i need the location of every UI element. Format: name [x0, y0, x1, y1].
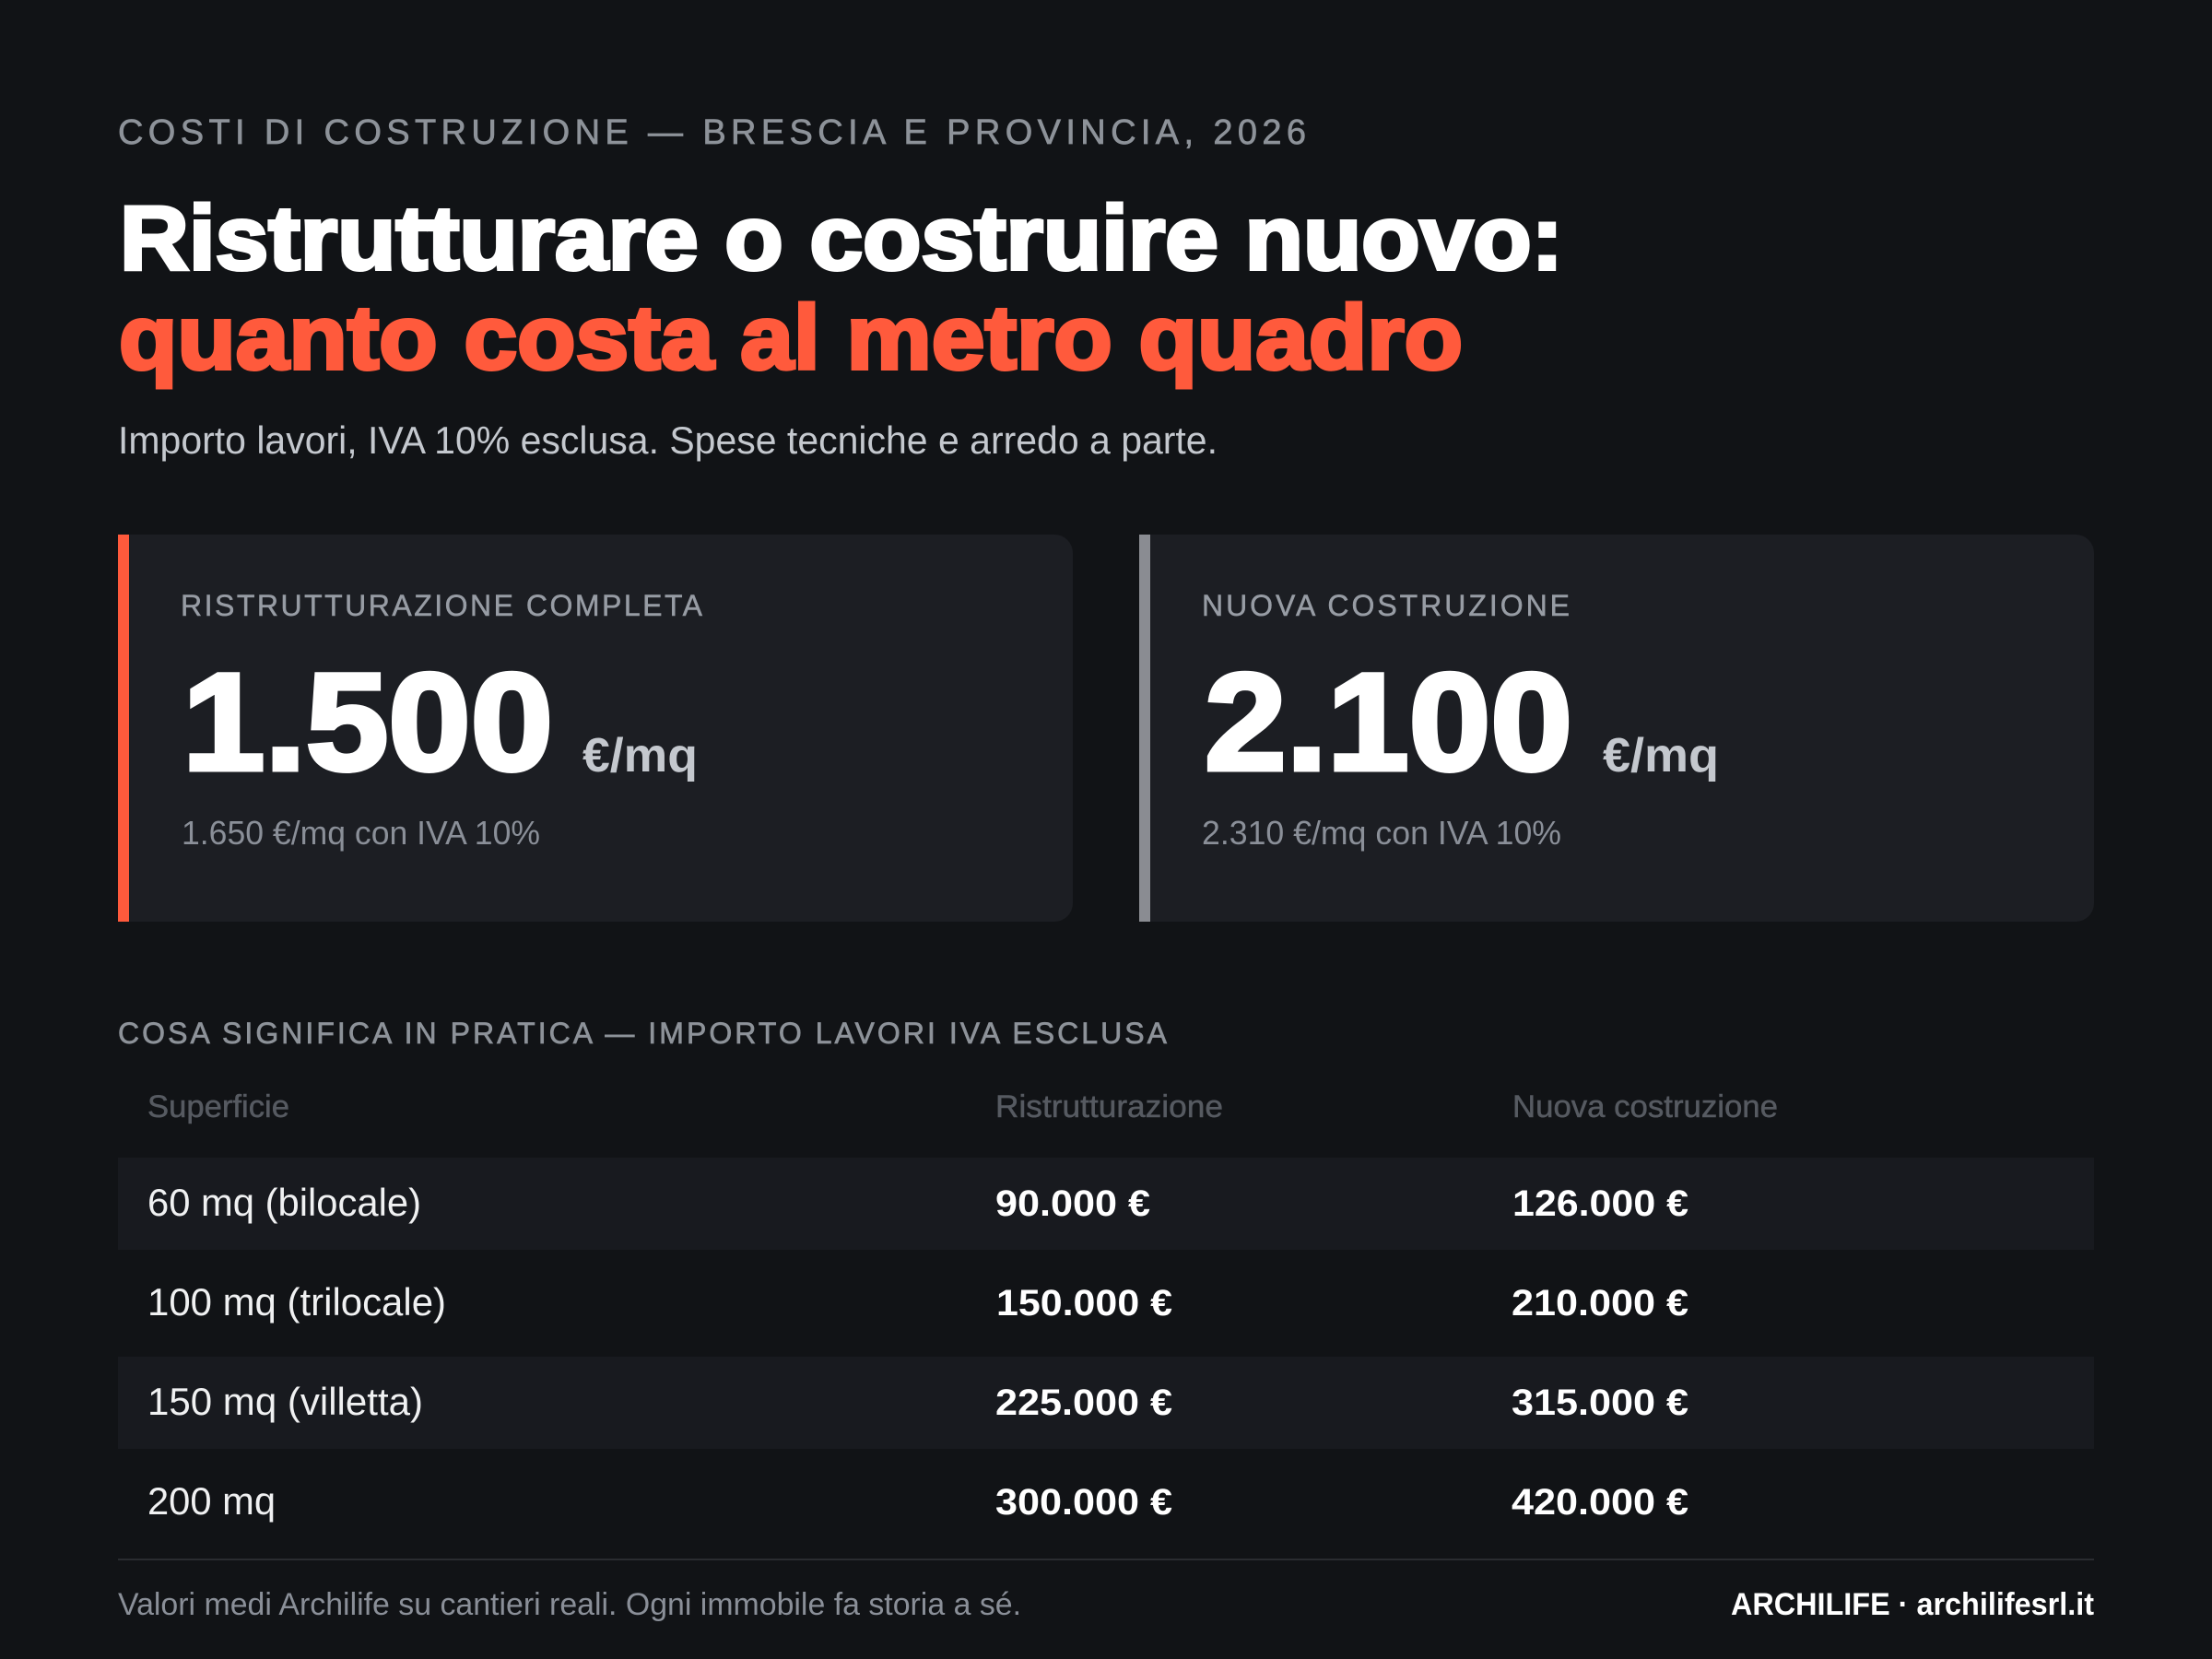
- price unit: €/mq: [1603, 729, 1719, 782]
- row: 150 mq: [118, 1357, 2094, 1449]
- panel: ristrutturazione completa: [118, 535, 1073, 922]
- card label: NUOVA COSTRUZIONE: [1202, 589, 1570, 622]
- subtitle: Importo lavori, IVA 10% esclusa. Spese tecniche e arredo a parte.: [118, 418, 1218, 462]
- price with VAT: 1.650 €/mq con IVA 10%: [182, 814, 540, 852]
- table header: Ristrutturazione: [995, 1089, 1223, 1124]
- card accent bar: [1139, 535, 1150, 922]
- row: 200 mq: [147, 1479, 1688, 1523]
- card label: RISTRUTTURAZIONE COMPLETA: [181, 589, 703, 622]
- price unit: €/mq: [582, 729, 698, 782]
- row: 100 mq: [147, 1280, 1688, 1324]
- row: 60 mq: 60 mq (bilocale): [147, 1181, 421, 1224]
- row: 100 mq: 150.000 €: [996, 1283, 1172, 1324]
- row: 100 mq: 210.000 €: [1512, 1283, 1688, 1324]
- row: 200 mq: 200 mq: [147, 1479, 276, 1523]
- footer brand: ARCHILIFE · archilifesrl.it: [1731, 1587, 2094, 1622]
- price value: 1.500: [182, 644, 553, 799]
- section heading: COSA SIGNIFICA IN PRATICA — IMPORTO LAVORI IVA ESCLUSA: [118, 1017, 1168, 1050]
- row: 200 mq: 420.000 €: [1512, 1482, 1688, 1523]
- card background: [1139, 535, 2094, 922]
- table header: Superficie: [147, 1089, 289, 1124]
- title line 2: quanto costa al metro quadro: [119, 287, 1463, 388]
- table header: [147, 1089, 1778, 1124]
- card accent bar: [118, 535, 129, 922]
- eyebrow: COSTI DI COSTRUZIONE — BRESCIA E PROVINCIA, 2026: [118, 113, 1306, 152]
- row: 60 mq: [118, 1158, 2094, 1250]
- price with VAT: 2.310 €/mq con IVA 10%: [1202, 814, 1561, 852]
- card background: [118, 535, 1073, 922]
- row: 200 mq: 300.000 €: [995, 1482, 1172, 1523]
- table header: Nuova costruzione: [1512, 1089, 1778, 1124]
- row: 150 mq: 225.000 €: [995, 1382, 1172, 1423]
- row: 150 mq: 150 mq (villetta): [147, 1380, 423, 1423]
- footer note: Valori medi Archilife su cantieri reali. Ogni immobile fa storia a sé.: [118, 1587, 1021, 1622]
- row: 150 mq: 315.000 €: [1512, 1382, 1688, 1423]
- row: 100 mq: 100 mq (trilocale): [147, 1280, 446, 1324]
- table: [118, 1089, 2094, 1523]
- row: 60 mq: 126.000 €: [1512, 1183, 1688, 1224]
- panel: nuova costruzione: [1139, 535, 2094, 922]
- title: [119, 187, 1563, 388]
- title line 1: Ristrutturare o costruire nuovo:: [120, 187, 1563, 288]
- row: 60 mq: 90.000 €: [995, 1183, 1150, 1224]
- price value: 2.100: [1205, 644, 1572, 799]
